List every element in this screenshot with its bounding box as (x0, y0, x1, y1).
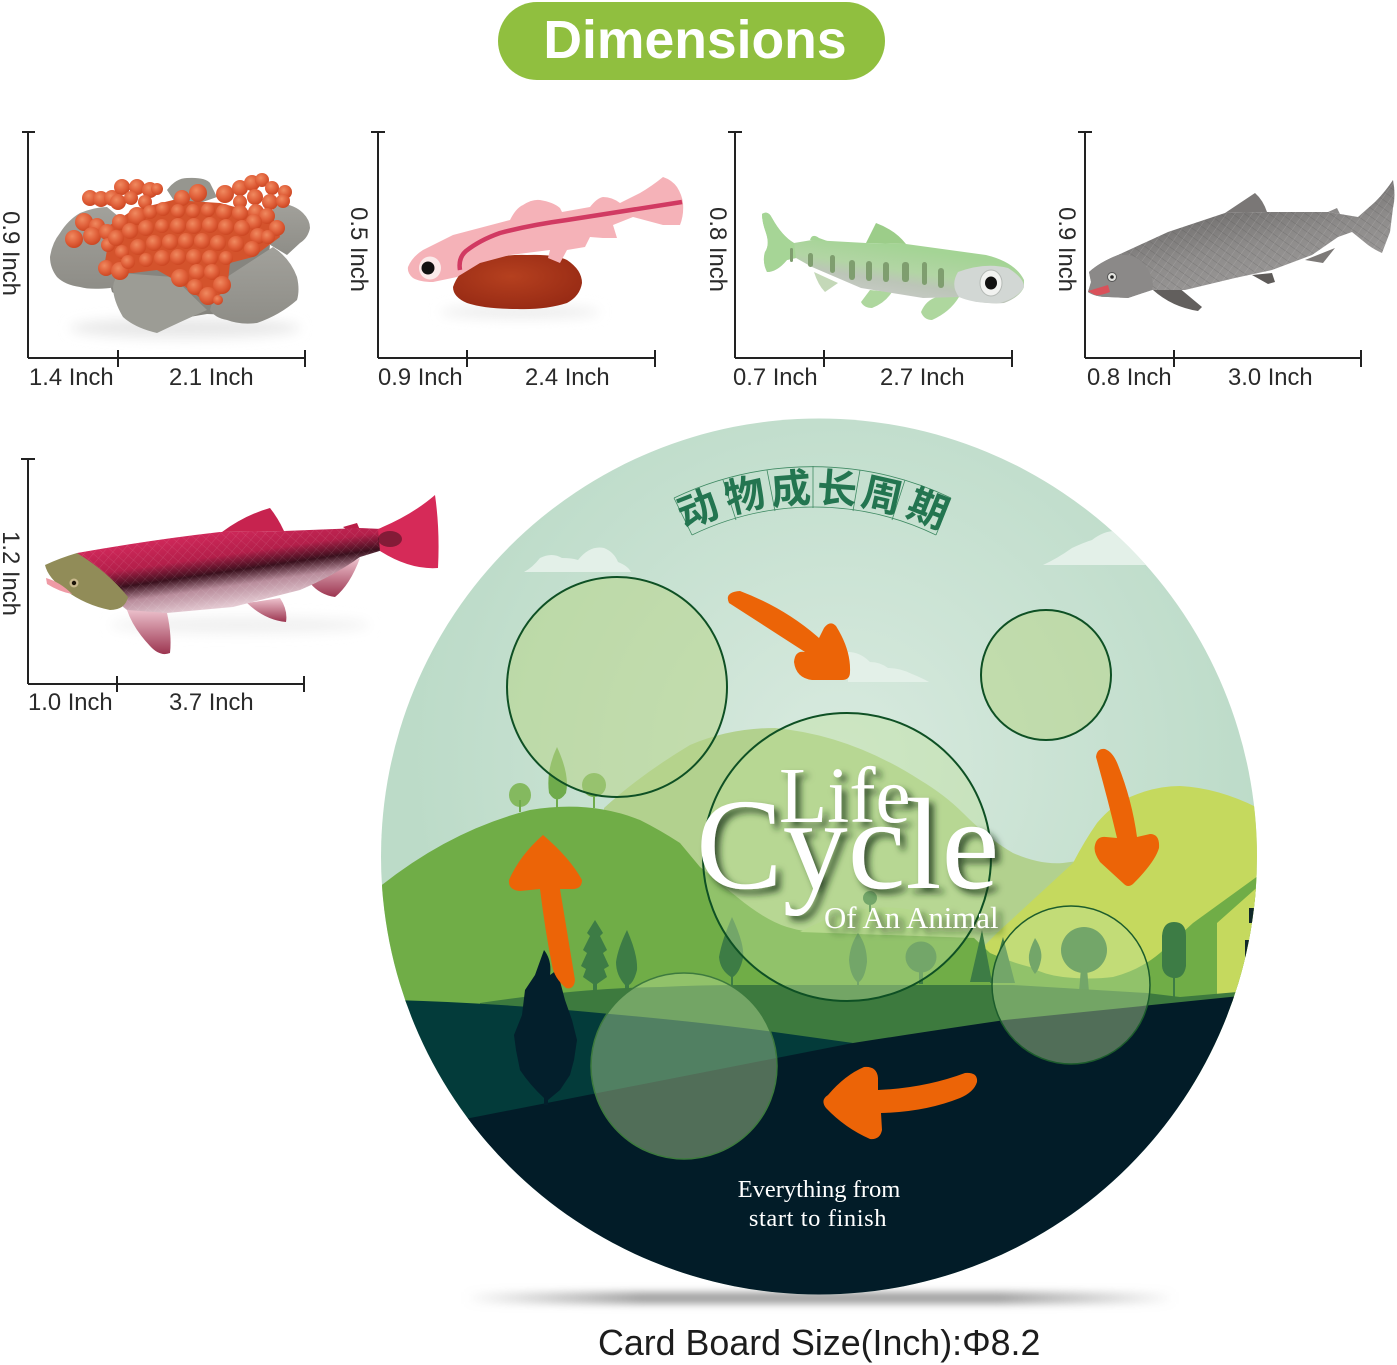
panel: life cycle card board (378, 418, 1262, 1300)
sample circle 4 (992, 906, 1150, 1064)
width labels: 0.9 Inch (378, 364, 463, 391)
title: Life Cycle Of An Animal: Cycle (696, 773, 999, 917)
dark leaf tree (514, 950, 577, 1105)
arrow: right (1095, 749, 1159, 886)
panel: grey adult salmon with dimensions: 3.0 Inch (1228, 364, 1313, 391)
mid green layer and left hill (378, 807, 1262, 1005)
panel: red spawning salmon with dimensions (0, 459, 439, 716)
card board size caption: Card Board Size(Inch):Φ8.2 (598, 1323, 1040, 1363)
panel: eggs on stones with dimensions: 2.1 Inch (169, 364, 254, 391)
tagline: Everything from (738, 1176, 900, 1203)
sample circle 3 centre (703, 713, 991, 1001)
chinese arched heading (674, 466, 952, 536)
chinese arched heading: 动 (668, 472, 726, 540)
width labels: 1.4 Inch (29, 364, 114, 391)
dimension axes (22, 132, 305, 367)
small hilltop trees (509, 747, 606, 812)
landscape trees (581, 891, 1186, 998)
icon: pink alevin with yolk sac (408, 177, 683, 318)
chinese arched heading: 长 (815, 456, 859, 516)
chinese arched heading: 周 (857, 460, 909, 525)
sample circle 1 (507, 577, 727, 797)
height label: 0.5 Inch (345, 207, 372, 292)
title: Life Cycle Of An Animal: Life (779, 753, 911, 840)
sky (381, 418, 1257, 1295)
arrow: left (509, 835, 582, 988)
panel: eggs on stones with dimensions (0, 132, 310, 391)
tagline (738, 1180, 900, 1226)
panel: alevin with dimensions: 2.4 Inch (525, 364, 610, 391)
panel: grey adult salmon with dimensions (1053, 132, 1394, 391)
title pill: Dimensions (498, 2, 885, 80)
chinese arched heading: 成 (769, 456, 813, 516)
sample circle 2 (981, 610, 1111, 740)
icon: stones and eggs (50, 173, 310, 338)
dimension axes (21, 459, 304, 692)
icon: grey salmon (1088, 180, 1394, 311)
icon: green salmon fry (762, 213, 1024, 320)
chinese arched heading: 物 (718, 460, 770, 525)
house wall (1217, 888, 1256, 1000)
panel: alevin with dimensions (345, 132, 683, 391)
height label: 0.8 Inch (704, 207, 731, 292)
dimension axes (371, 132, 655, 367)
icon: red salmon (45, 495, 439, 654)
width labels: 0.7 Inch (733, 364, 818, 391)
dimension axes (1078, 132, 1361, 367)
height label: 0.9 Inch (1053, 207, 1080, 292)
arrow: top (728, 591, 850, 680)
lighter hump (800, 930, 974, 938)
width labels: 0.8 Inch (1087, 364, 1172, 391)
right lime hill (985, 786, 1262, 1010)
panel: red spawning salmon with dimensions: 3.7 Inch (169, 689, 254, 716)
title: Life Cycle Of An Animal: Of An Animal (824, 901, 999, 935)
chinese arched heading: 期 (900, 472, 958, 540)
back hill (604, 728, 1074, 946)
sample circle 5 (591, 973, 777, 1159)
title pill: Dimensions: Dimensions (543, 11, 847, 70)
panel: green fry with dimensions: 2.7 Inch (880, 364, 965, 391)
dimension axes (728, 132, 1012, 367)
green ground band (480, 985, 1260, 1100)
navy ground (468, 996, 1234, 1294)
width labels: 1.0 Inch (28, 689, 113, 716)
board shadow (465, 1292, 1175, 1304)
tagline: start to finish (749, 1205, 887, 1232)
clouds (524, 531, 1150, 682)
teal ground (395, 1000, 853, 1180)
arrow: bottom (823, 1067, 977, 1139)
panel: green fry with dimensions (704, 132, 1024, 391)
